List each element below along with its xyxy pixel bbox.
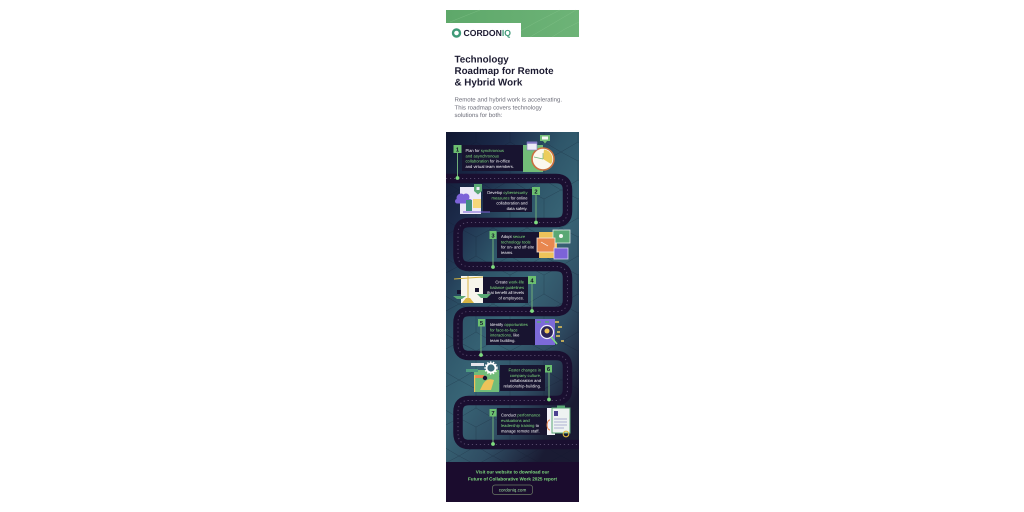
step 1: and virtual team members. — [466, 164, 514, 169]
step 2: 2 — [534, 188, 538, 196]
icon: app windows — [537, 230, 570, 259]
title — [454, 54, 554, 88]
step 5 — [478, 319, 564, 357]
step 5: Identify opportunities — [490, 322, 528, 327]
step 1: collaboration for in-office — [466, 159, 511, 164]
step 1 — [454, 135, 554, 180]
step 2 — [455, 184, 540, 224]
step 4: 4 — [530, 278, 534, 284]
footer: Visit our website to download our — [476, 470, 549, 474]
icon: clock and calendar — [523, 135, 554, 172]
step 4: balance guidelines — [490, 285, 524, 290]
step 6: collaboration and — [510, 378, 542, 383]
footer — [446, 462, 579, 502]
step 2: measures for online — [492, 195, 528, 200]
step 5: interactions, like — [490, 333, 520, 338]
road — [446, 178, 579, 444]
step 2: collaboration and — [496, 201, 528, 206]
step 3: technology tools — [501, 239, 531, 244]
step 4: that benefit all levels — [487, 290, 524, 295]
step 6: relationship-building. — [503, 383, 541, 388]
logo: CORDONIQ — [464, 28, 511, 38]
icon: gear and person — [466, 362, 499, 392]
icon: magnifier and lightbulb — [535, 319, 564, 345]
header banner — [446, 10, 579, 37]
step 5: 5 — [480, 321, 484, 327]
step 3: for on- and off-site — [501, 245, 535, 250]
step 3: Adopt secure — [501, 234, 526, 239]
step 6 — [466, 362, 552, 401]
button: website: cordoniq.com — [499, 488, 526, 492]
footer: Future of Collaborative Work 2025 report — [468, 476, 557, 482]
step 7: Conduct performance — [501, 412, 541, 418]
icon: clipboard — [547, 406, 570, 437]
step 4: of employees. — [498, 295, 524, 300]
step 7: evaluations and — [501, 418, 530, 423]
step 3: 3 — [491, 232, 495, 240]
intro text — [454, 96, 562, 119]
step 3 — [490, 230, 570, 269]
icon: cloud and shield — [455, 184, 490, 214]
step 5: team building. — [490, 338, 516, 343]
step 7: manage remote staff. — [501, 428, 540, 433]
step 7 — [490, 406, 570, 446]
step 4: Create work-life — [495, 280, 525, 284]
step 7: leadership training to — [501, 423, 540, 428]
roadmap background — [446, 132, 579, 462]
step 1: 1 — [456, 148, 460, 154]
intro text: solutions for both: — [454, 112, 503, 119]
step 6: 6 — [547, 366, 551, 373]
title: & Hybrid Work — [454, 78, 523, 88]
title: Technology — [454, 54, 509, 66]
step 2: Develop cybersecurity — [487, 190, 528, 195]
step 3: teams. — [501, 250, 513, 255]
step 5: for face-to-face — [490, 327, 518, 332]
step 2: data safety. — [507, 206, 528, 211]
step 1: and asynchronous — [466, 153, 499, 158]
step 6: company culture, — [510, 373, 541, 378]
step 6: Foster changes in — [508, 368, 542, 372]
step 1: Plan for synchronous — [466, 148, 504, 153]
icon: balance scale — [453, 276, 491, 303]
intro text: Remote and hybrid work is accelerating. — [454, 96, 562, 104]
title: Roadmap for Remote — [454, 66, 554, 77]
logo — [446, 23, 521, 38]
step 4 — [453, 276, 536, 313]
step 7: 7 — [491, 411, 495, 417]
intro text: This roadmap covers technology — [454, 104, 543, 111]
